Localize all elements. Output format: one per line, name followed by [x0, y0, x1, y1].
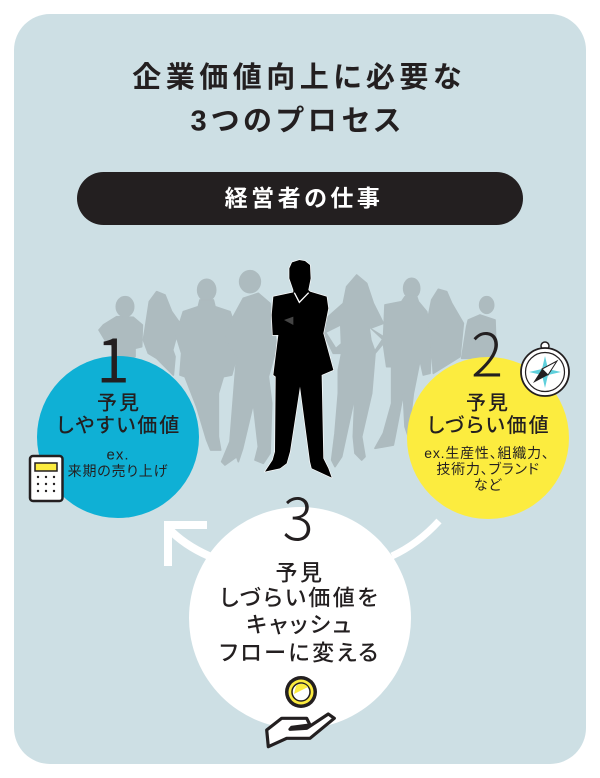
step 1 text: 来期の売り上げ [68, 463, 168, 479]
gray silhouettes: right group [323, 275, 496, 467]
step 1 text: ex. [106, 446, 130, 464]
step 2 text [424, 392, 551, 493]
step 1 circle [37, 356, 199, 518]
step 3 text: フローに変える [219, 640, 381, 666]
arrow: from step 3 to step 1 [168, 525, 209, 566]
title: 3つのプロセス [190, 104, 406, 138]
banner: executive's job: 経営者の仕事 [225, 185, 383, 211]
icon: calculator [30, 456, 62, 501]
step 2 circle [407, 357, 569, 519]
step 2 text: ex.生産性、組織力、 [424, 445, 550, 461]
step 2 text: 予見 [466, 392, 510, 414]
step 3 text: しづらい価値を [220, 586, 380, 610]
step 3 circle [189, 507, 411, 729]
arc: from step 2 to step 3 [392, 521, 439, 556]
title [132, 61, 466, 138]
number 1: 1 [96, 314, 130, 400]
step 1 text [57, 392, 181, 479]
step 3 text: 予見 [275, 560, 325, 586]
step 2 text: など [474, 477, 502, 493]
step 1 text: 予見 [97, 392, 141, 414]
icon: coin [285, 676, 317, 708]
number 3: 3 [282, 473, 314, 557]
icon: compass [521, 342, 569, 396]
icon: hand [267, 714, 334, 747]
banner: executive's job [77, 172, 523, 225]
step 3 text: キャッシュ [246, 612, 354, 638]
step 2 text: しづらい価値 [427, 414, 551, 437]
step 1 text: しやすい価値 [57, 414, 181, 437]
title: 企業価値向上に必要な [132, 61, 466, 94]
gray silhouettes: left group [99, 271, 277, 465]
number 2: 2 [471, 308, 503, 394]
step 2 text: 技術力、ブランド [436, 461, 540, 477]
step 3 text [219, 560, 381, 666]
crowd arm gaps [327, 326, 382, 349]
black silhouette: executive [265, 260, 333, 478]
